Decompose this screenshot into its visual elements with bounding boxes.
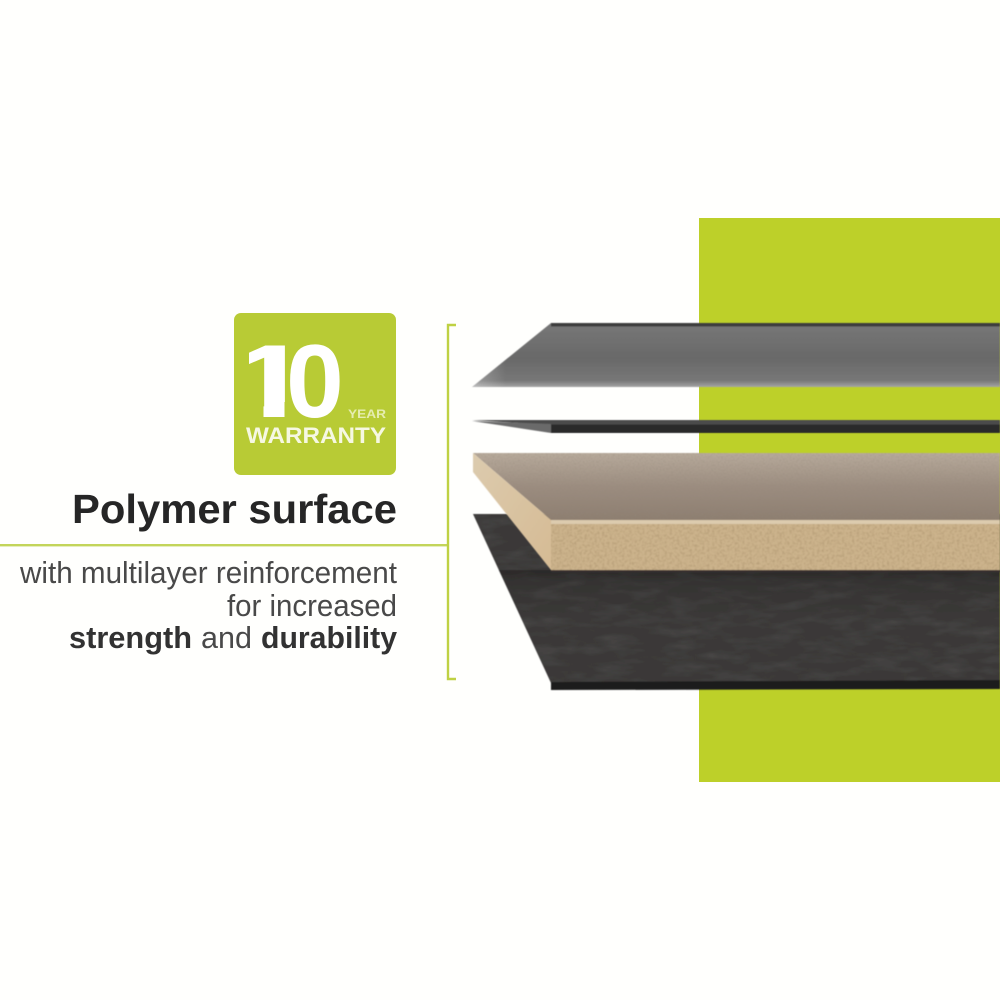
heading: Polymer surface bbox=[72, 486, 397, 532]
line 3: strength bbox=[69, 621, 192, 655]
line 3: and bbox=[201, 621, 252, 655]
layer 4: dark textured base sheet bbox=[473, 514, 1000, 690]
bracket bbox=[448, 325, 456, 679]
badge number 10: 0 bbox=[286, 324, 344, 440]
green background panel bbox=[699, 218, 1000, 782]
line 3: durability bbox=[261, 621, 397, 655]
warranty badge bbox=[229, 313, 396, 475]
layer 2: thin reinforcement sheet bbox=[472, 420, 1000, 433]
line 1: with multilayer reinforcement bbox=[19, 556, 397, 590]
layer 1: polymer surface sheet bbox=[472, 323, 1000, 387]
board front face bbox=[551, 520, 1000, 570]
layer 3: core board bbox=[473, 453, 1000, 572]
badge label warranty: WARRANTY bbox=[246, 423, 386, 448]
line 2: for increased bbox=[227, 589, 397, 623]
board side face bbox=[473, 453, 551, 570]
connector line bbox=[0, 544, 448, 546]
board top face bbox=[473, 453, 1000, 520]
badge label year: YEAR bbox=[348, 409, 387, 421]
description text bbox=[19, 556, 397, 655]
line 3 bbox=[69, 621, 397, 655]
badge number 10: 1 bbox=[229, 324, 313, 439]
